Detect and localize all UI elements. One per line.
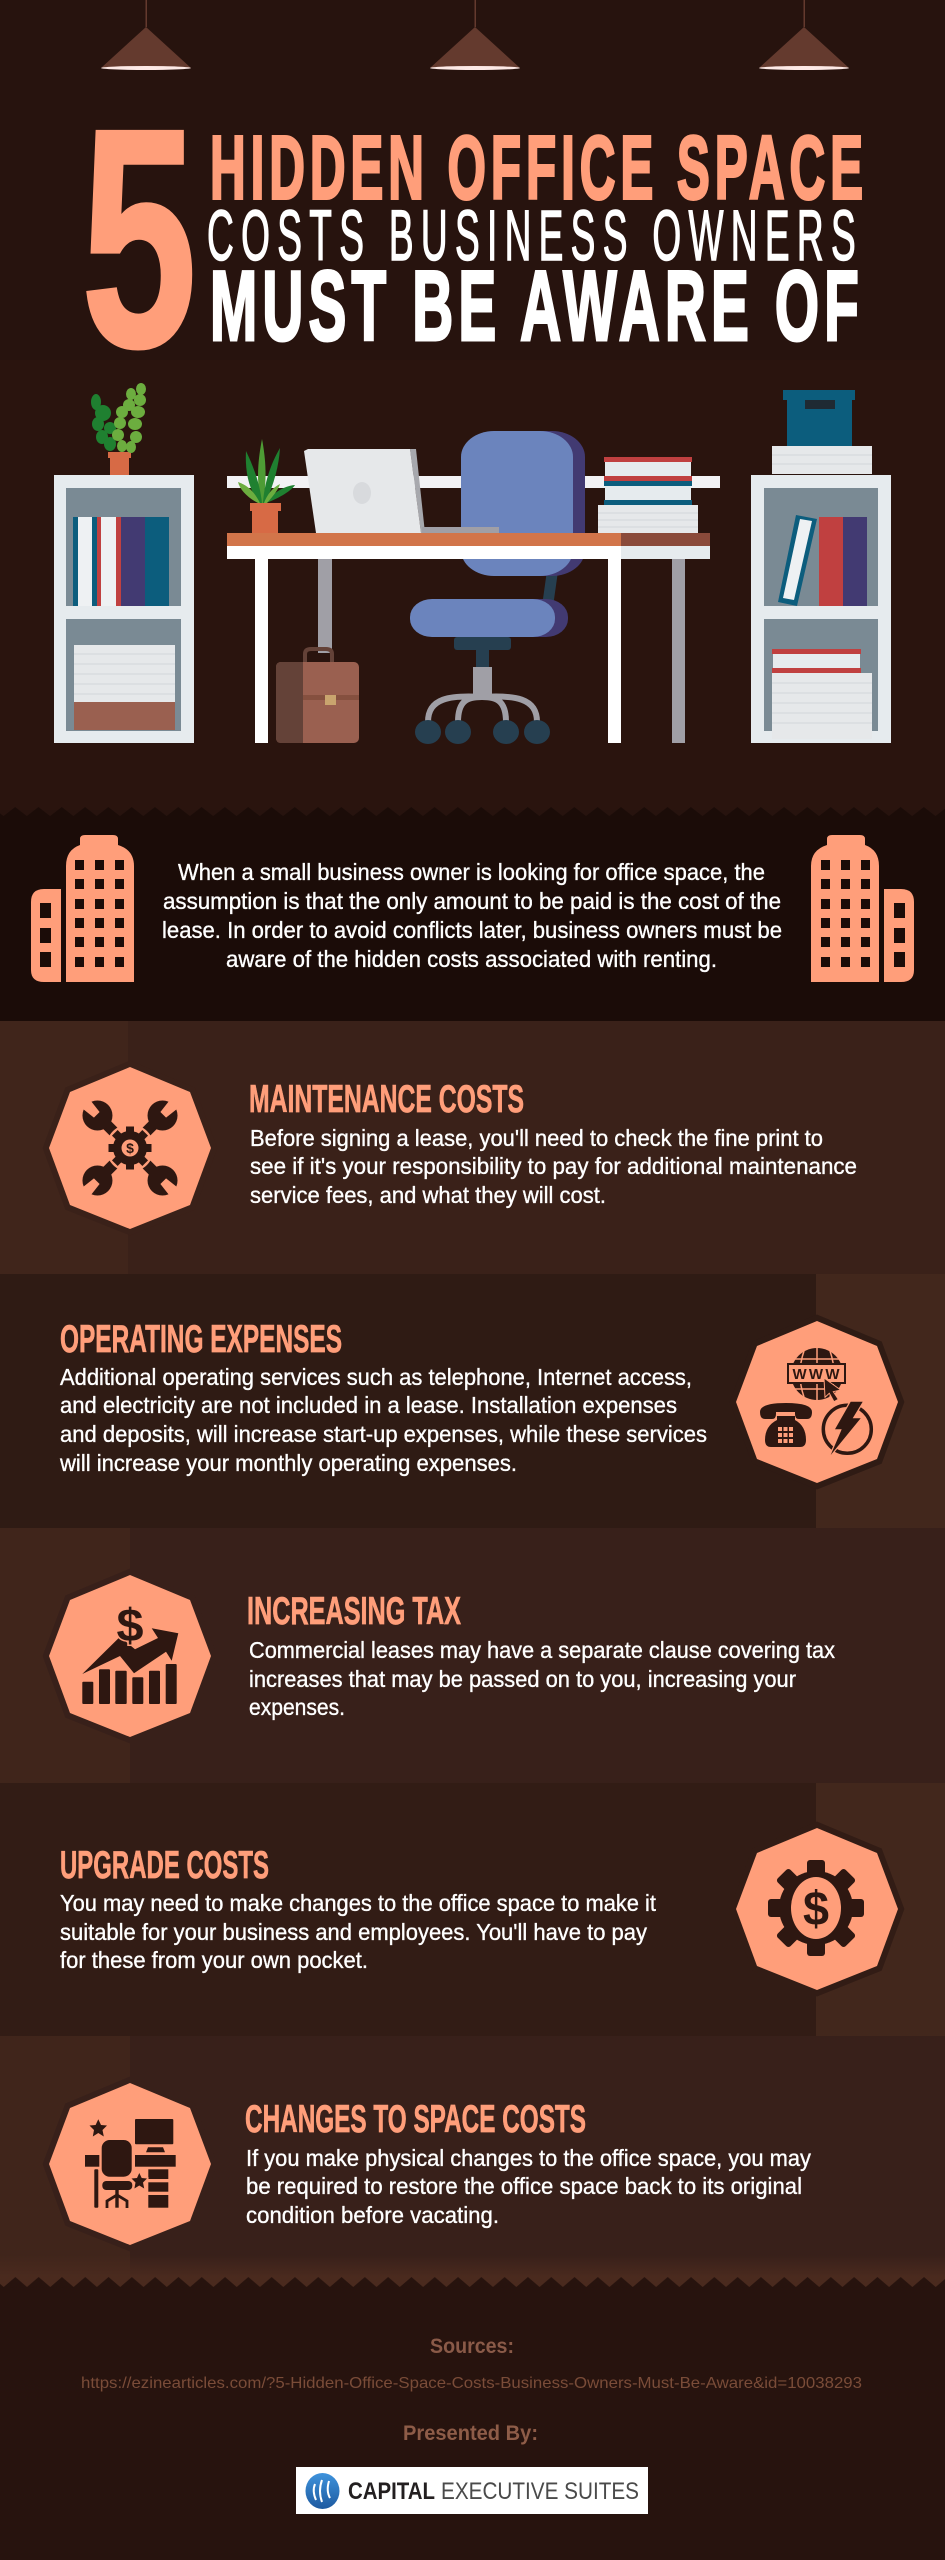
office illustration <box>54 383 891 744</box>
heading: increasing tax: INCREASING TAX <box>247 1590 461 1633</box>
body: changes to space costs: be required to restore the office space back to its original <box>246 2173 802 2199</box>
desk back rail <box>227 476 720 488</box>
body: changes to space costs: If you make physical changes to the office space, you may <box>246 2145 811 2171</box>
logo: capital executive suites: CAPITAL <box>348 2478 435 2505</box>
body: maintenance costs: see if it's your responsibility to pay for additional maintenance <box>250 1153 857 1179</box>
sources label: Sources: <box>430 2335 514 2358</box>
body: upgrade costs: You may need to make changes to the office space to make it <box>60 1890 657 1916</box>
heading: maintenance costs: MAINTENANCE COSTS <box>249 1078 524 1121</box>
body: maintenance costs: service fees, and what they will cost. <box>250 1182 606 1208</box>
body: operating expenses: will increase your monthly operating expenses. <box>59 1450 517 1476</box>
icon: www, telephone, electricity: WWW <box>792 1366 840 1383</box>
lamps <box>101 0 849 70</box>
body: increasing tax: increases that may be passed on to you, increasing your <box>249 1666 796 1692</box>
intro text: assumption is that the only amount to be paid is the cost of the <box>163 888 781 914</box>
icon: buildings left <box>31 835 134 982</box>
intro text: aware of the hidden costs associated with renting. <box>226 946 717 972</box>
lamp centre <box>430 0 520 70</box>
source url: https://ezinearticles.com/?5-Hidden-Office-Space-Costs-Business-Owners-Must-Be-Aware&id=10038293 <box>81 2375 862 2392</box>
body: upgrade costs: suitable for your business and employees. You'll have to pay <box>60 1919 647 1945</box>
body: changes to space costs: condition before vacating. <box>246 2202 499 2228</box>
lamp right <box>759 0 849 70</box>
body: upgrade costs <box>60 1890 657 1973</box>
desk plant <box>238 439 295 533</box>
intro text: When a small business owner is looking for office space, the <box>178 859 765 885</box>
icon: gear with dollar <box>736 1828 898 1990</box>
icon: www, telephone, electricity <box>736 1321 898 1483</box>
body: operating expenses <box>59 1364 707 1476</box>
body: operating expenses: and deposits, will increase start-up expenses, while these services <box>60 1421 707 1447</box>
desk top <box>227 533 710 743</box>
logo: capital executive suites: EXECUTIVE SUITES <box>441 2478 639 2505</box>
laptop <box>304 449 499 533</box>
panel: maintenance costs <box>0 1021 945 1274</box>
intro band <box>0 807 945 1021</box>
title <box>81 65 868 413</box>
icon: rising chart with dollar <box>49 1575 211 1737</box>
body: operating expenses: Additional operating services such as telephone, Internet access, <box>60 1364 692 1390</box>
logo: capital executive suites <box>296 2467 648 2514</box>
briefcase <box>276 649 359 743</box>
body: upgrade costs: for these from your own pocket. <box>60 1947 368 1973</box>
right shelf <box>751 475 891 743</box>
left shelf plant <box>91 383 146 475</box>
body: maintenance costs <box>250 1125 857 1208</box>
left bookshelf <box>54 475 194 743</box>
icon: buildings right <box>811 835 914 982</box>
book stack on desk <box>598 457 698 533</box>
panel: upgrade costs <box>0 1783 945 2036</box>
heading: operating expenses: OPERATING EXPENSES <box>60 1318 342 1361</box>
intro text: lease. In order to avoid conflicts later, business owners must be <box>162 917 782 943</box>
body: operating expenses: and electricity are not included in a lease. Installation expenses <box>60 1392 677 1418</box>
panel: operating expenses <box>0 1274 945 1528</box>
panel: changes to space costs <box>0 2036 945 2287</box>
body: increasing tax <box>249 1637 835 1720</box>
icon: wrenches and gear: $ <box>126 1140 134 1156</box>
icon: office furniture <box>49 2083 211 2245</box>
panel: increasing tax <box>0 1528 945 1783</box>
icon: gear with dollar: $ <box>803 1883 829 1936</box>
office chair <box>410 431 585 744</box>
icon: rising chart with dollar: $ <box>116 1599 144 1651</box>
intro text <box>162 859 782 972</box>
heading: changes to space costs: CHANGES TO SPACE COSTS <box>245 2098 586 2141</box>
body: increasing tax: Commercial leases may have a separate clause covering tax <box>249 1637 835 1663</box>
heading: upgrade costs: UPGRADE COSTS <box>60 1844 269 1887</box>
presented by label: Presented By: <box>403 2422 538 2445</box>
title numeral 5: 5 <box>81 65 197 413</box>
footer <box>81 2335 862 2514</box>
lamp left <box>101 0 191 70</box>
body: maintenance costs: Before signing a lease, you'll need to check the fine print to <box>250 1125 823 1151</box>
body: increasing tax: expenses. <box>249 1694 345 1720</box>
desk back legs <box>318 559 685 743</box>
storage box and paper on right shelf <box>772 390 872 474</box>
body: changes to space costs <box>246 2145 811 2228</box>
icon: wrenches and gear <box>49 1067 211 1229</box>
